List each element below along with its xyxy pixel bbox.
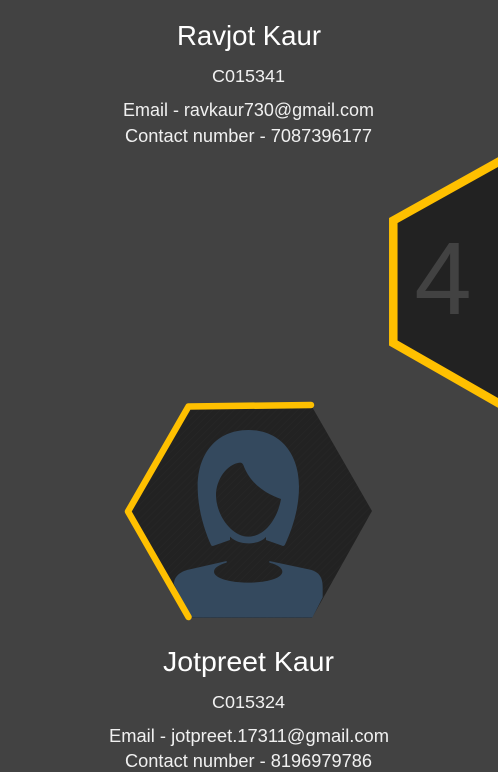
hexagon bbox=[393, 161, 498, 404]
hexagon background bbox=[126, 405, 372, 618]
email: Email - jotpreet.17311@gmail.com bbox=[109, 726, 389, 746]
portrait hexagon bbox=[126, 405, 372, 618]
name heading: Ravjot Kaur bbox=[177, 20, 321, 51]
contact number: Contact number - 8196979786 bbox=[125, 751, 372, 771]
contact number: Contact number - 7087396177 bbox=[125, 126, 372, 146]
number 4: 4 bbox=[414, 221, 472, 336]
hexagon badge with number 4 bbox=[393, 161, 498, 404]
email: Email - ravkaur730@gmail.com bbox=[123, 100, 374, 120]
member one: Ravjot Kaur bbox=[123, 20, 374, 146]
name heading: Jotpreet Kaur bbox=[163, 646, 334, 677]
hair bbox=[198, 430, 299, 546]
member ID: C015341 bbox=[212, 66, 285, 86]
icon: woman avatar bbox=[174, 430, 323, 618]
member ID: C015324 bbox=[212, 692, 285, 712]
shoulders bbox=[174, 561, 323, 618]
yellow partial outline bbox=[128, 405, 311, 617]
member two: Jotpreet Kaur bbox=[109, 646, 389, 771]
